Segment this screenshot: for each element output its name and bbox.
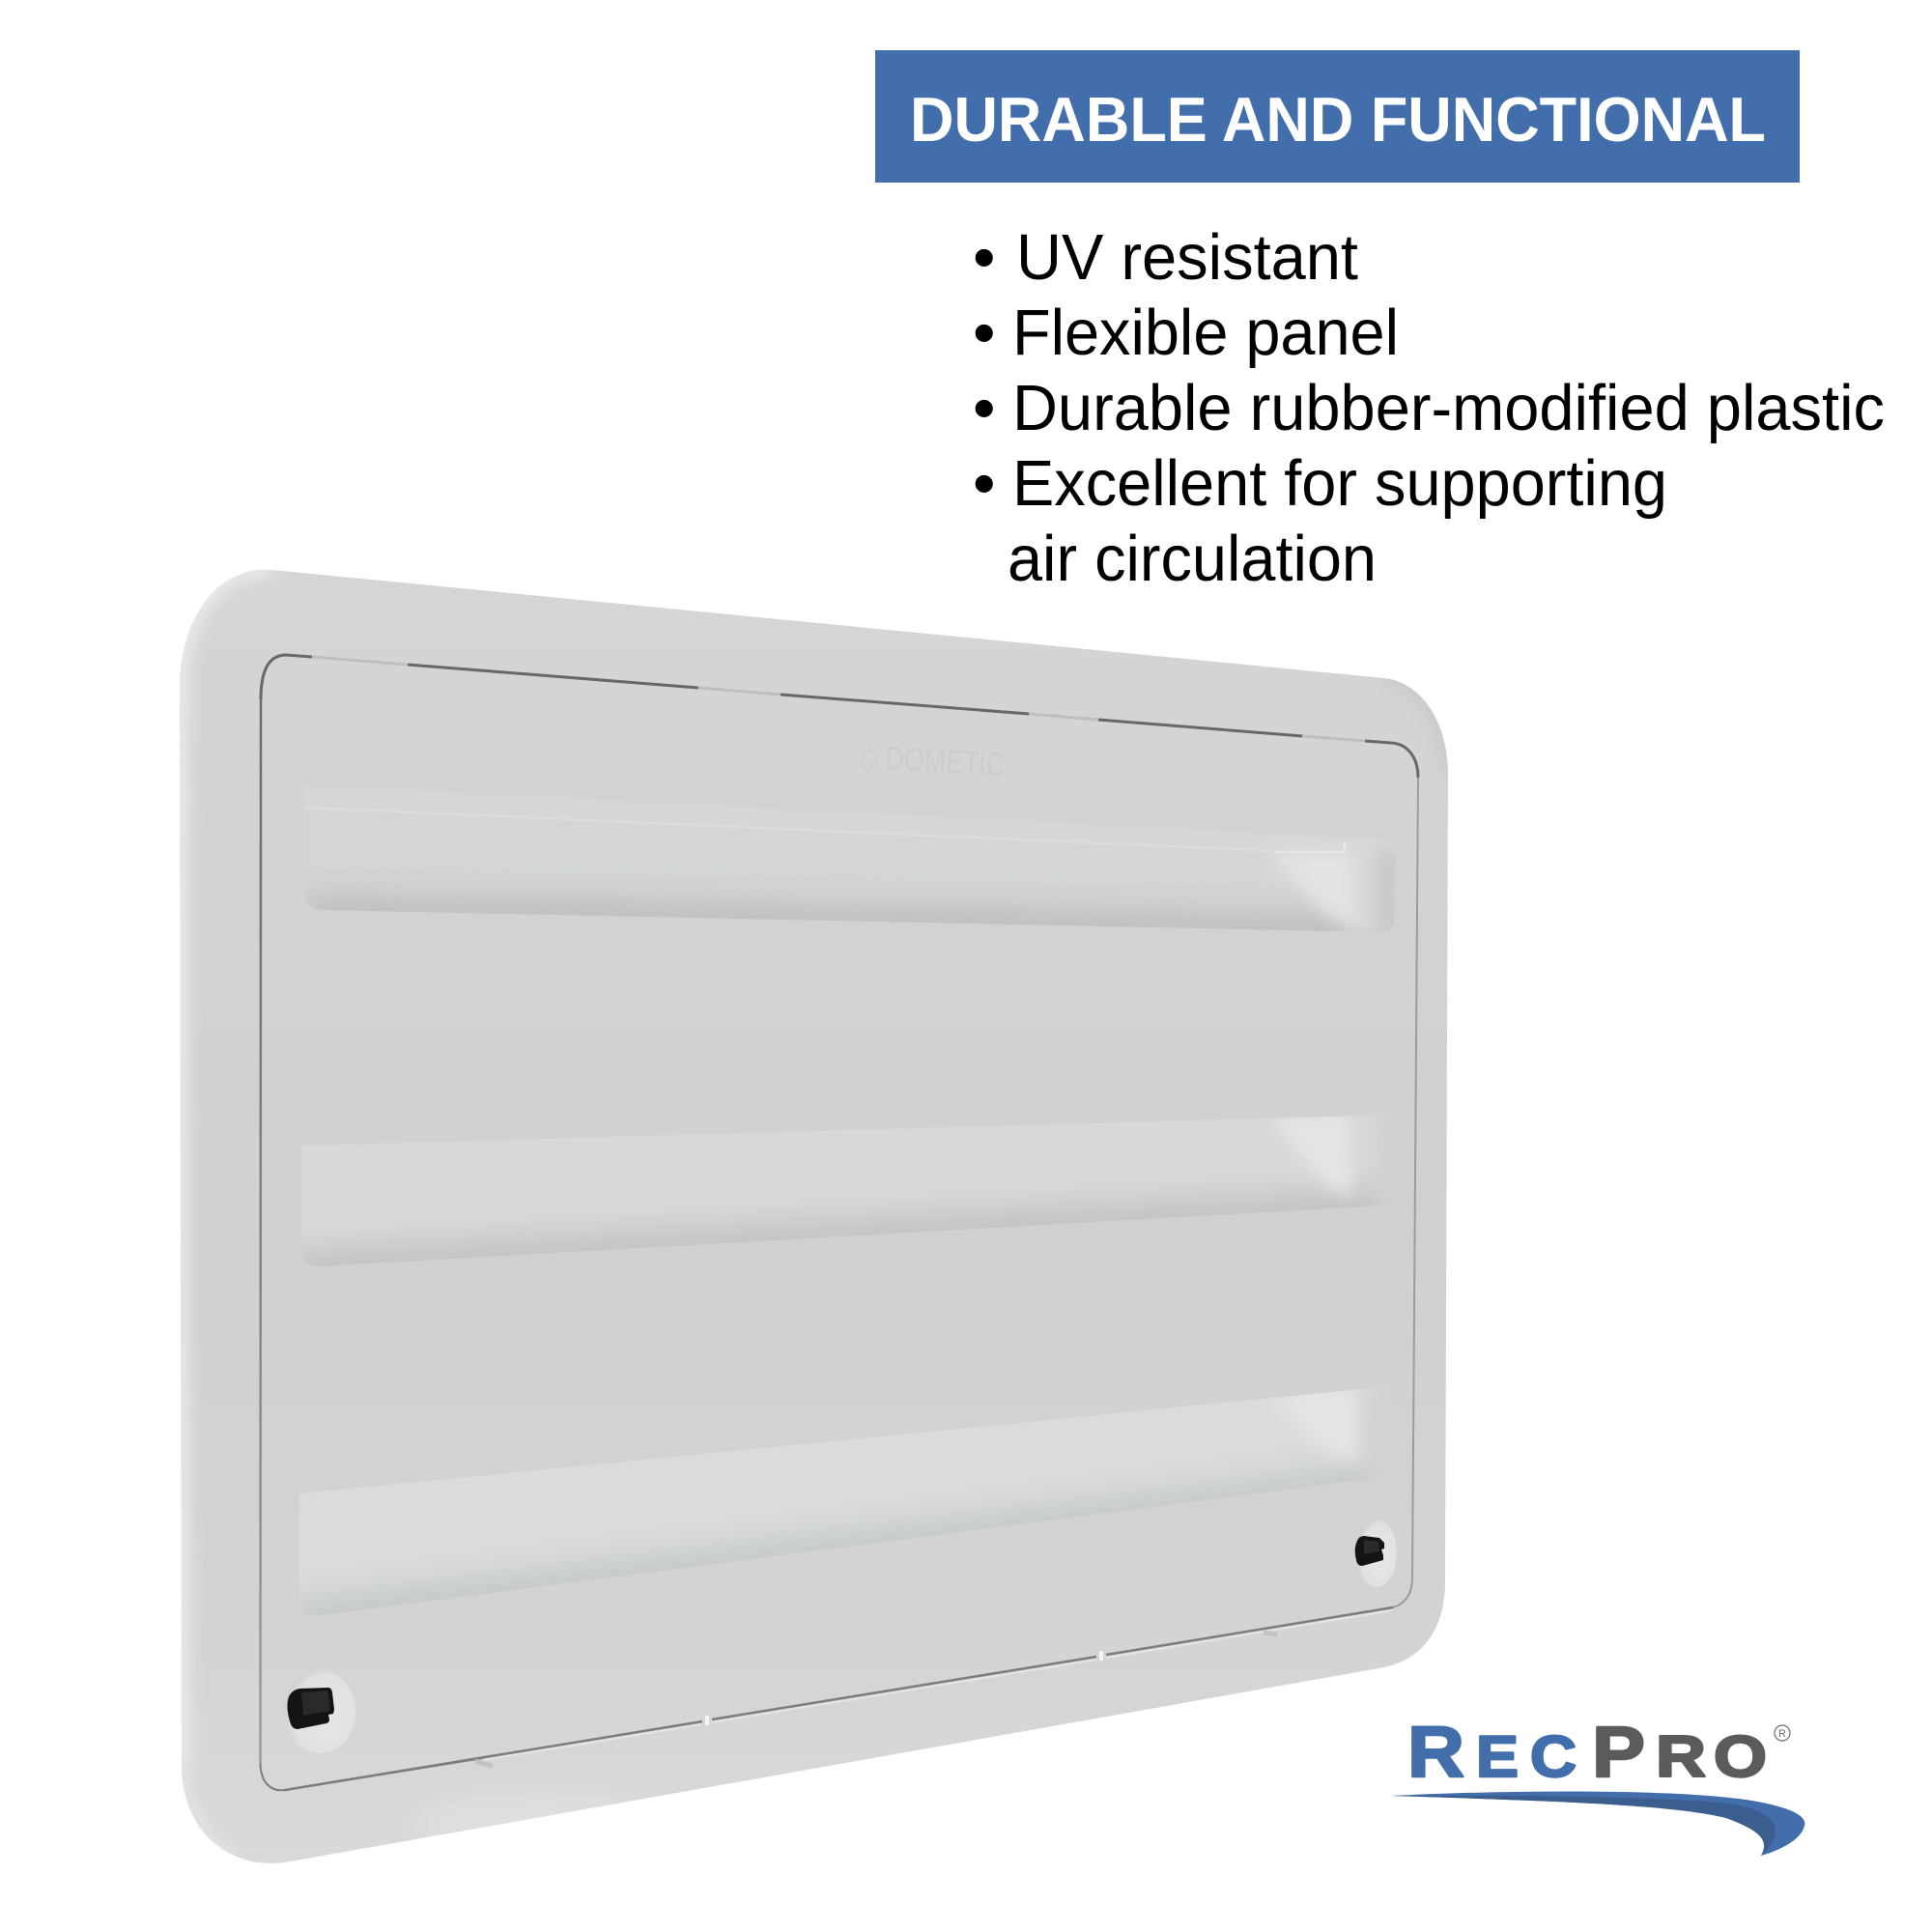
header banner (875, 50, 1800, 183)
continuation: air circulation: air circulation (1008, 523, 1377, 595)
bullet: excellent for supporting: • (973, 447, 995, 520)
louver 1 (304, 808, 1395, 931)
latch: lower right (1355, 1520, 1397, 1587)
logo wordmark: E (1476, 1724, 1519, 1789)
bullet: durable plastic: Durable rubber-modified plastic (1012, 372, 1885, 444)
logo wordmark: R (1407, 1712, 1464, 1792)
heading: DURABLE AND FUNCTIONAL (910, 84, 1766, 155)
bullet: durable plastic: • (973, 372, 995, 444)
bullet: UV resistant: UV resistant (1016, 221, 1358, 294)
feature list (973, 221, 1885, 595)
logo wordmark: O (1714, 1724, 1767, 1789)
product: vent panel (174, 565, 1454, 1869)
louver 3 (299, 1389, 1365, 1616)
outer frame (174, 565, 1454, 1869)
bullet: flexible panel: Flexible panel (1012, 297, 1399, 369)
bullet: excellent for supporting: Excellent for supporting (1012, 447, 1667, 520)
logo swoosh (1391, 1791, 1804, 1856)
bullet: UV resistant: • (973, 221, 995, 294)
registered mark (1775, 1725, 1790, 1741)
louver 2 (301, 1116, 1376, 1266)
logo wordmark (1407, 1712, 1767, 1792)
embossed brand mark: ◇ DOMETIC (858, 739, 1006, 783)
bullet: flexible panel: • (973, 297, 995, 369)
logo: RecPro (1391, 1712, 1804, 1856)
registered mark: R (1778, 1728, 1786, 1740)
door seam (261, 655, 1418, 1790)
latch: lower left (284, 1670, 355, 1753)
logo wordmark: P (1592, 1712, 1645, 1792)
logo wordmark: R (1656, 1724, 1706, 1789)
logo wordmark: C (1530, 1724, 1577, 1789)
